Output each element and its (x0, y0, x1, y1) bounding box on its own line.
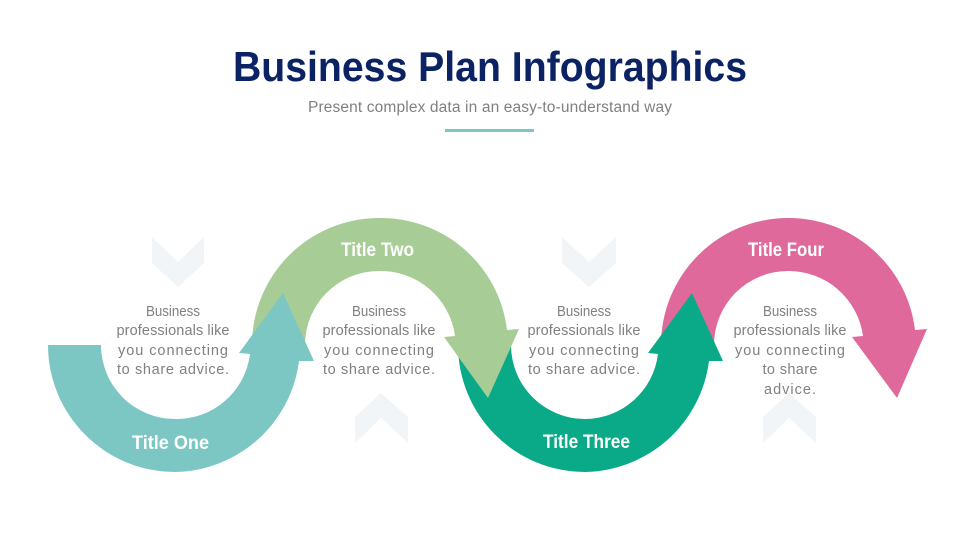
title: Business Plan Infographics (233, 43, 747, 90)
arrow: title three (458, 293, 723, 472)
subtitle: Present complex data in an easy-to-understand way (308, 99, 672, 116)
title underline accent (445, 129, 534, 132)
chevron: up, step two (355, 393, 408, 443)
text block: step four: Business (763, 304, 817, 320)
text block: step three: Business (557, 304, 611, 320)
chevron: up, step four (763, 393, 816, 443)
text block: step four (734, 304, 846, 398)
label: title one: Title One (132, 433, 209, 454)
text block: step two: you connecting (324, 343, 434, 359)
arrow: title two (252, 218, 519, 398)
text block: step one: you connecting (118, 343, 228, 359)
label: title two: Title Two (341, 240, 414, 261)
text block: step four: professionals like (734, 323, 846, 339)
text block: step one: professionals like (116, 323, 230, 339)
text block: step two: Business (352, 304, 406, 320)
label: title three: Title Three (543, 432, 630, 453)
arrow: title one (48, 293, 314, 472)
text block: step three: you connecting (529, 343, 639, 359)
text block: step two: to share advice. (323, 362, 435, 378)
chevron: down, step three (562, 237, 616, 287)
text block: step two (322, 304, 436, 378)
text block: step one: to share advice. (117, 362, 229, 378)
text block: step three (528, 304, 640, 378)
text block: step three: professionals like (528, 323, 640, 339)
arrow: title four (661, 218, 927, 398)
text block: step one: Business (146, 304, 200, 320)
text block: step three: to share advice. (528, 362, 640, 378)
text block: step four: advice. (764, 382, 816, 398)
text block: step four: to share (762, 362, 818, 378)
text block: step four: you connecting (735, 343, 845, 359)
label: title four: Title Four (748, 240, 825, 261)
text block: step two: professionals like (322, 323, 436, 339)
chevron: down, step one (152, 237, 204, 287)
text block: step one (116, 304, 230, 378)
